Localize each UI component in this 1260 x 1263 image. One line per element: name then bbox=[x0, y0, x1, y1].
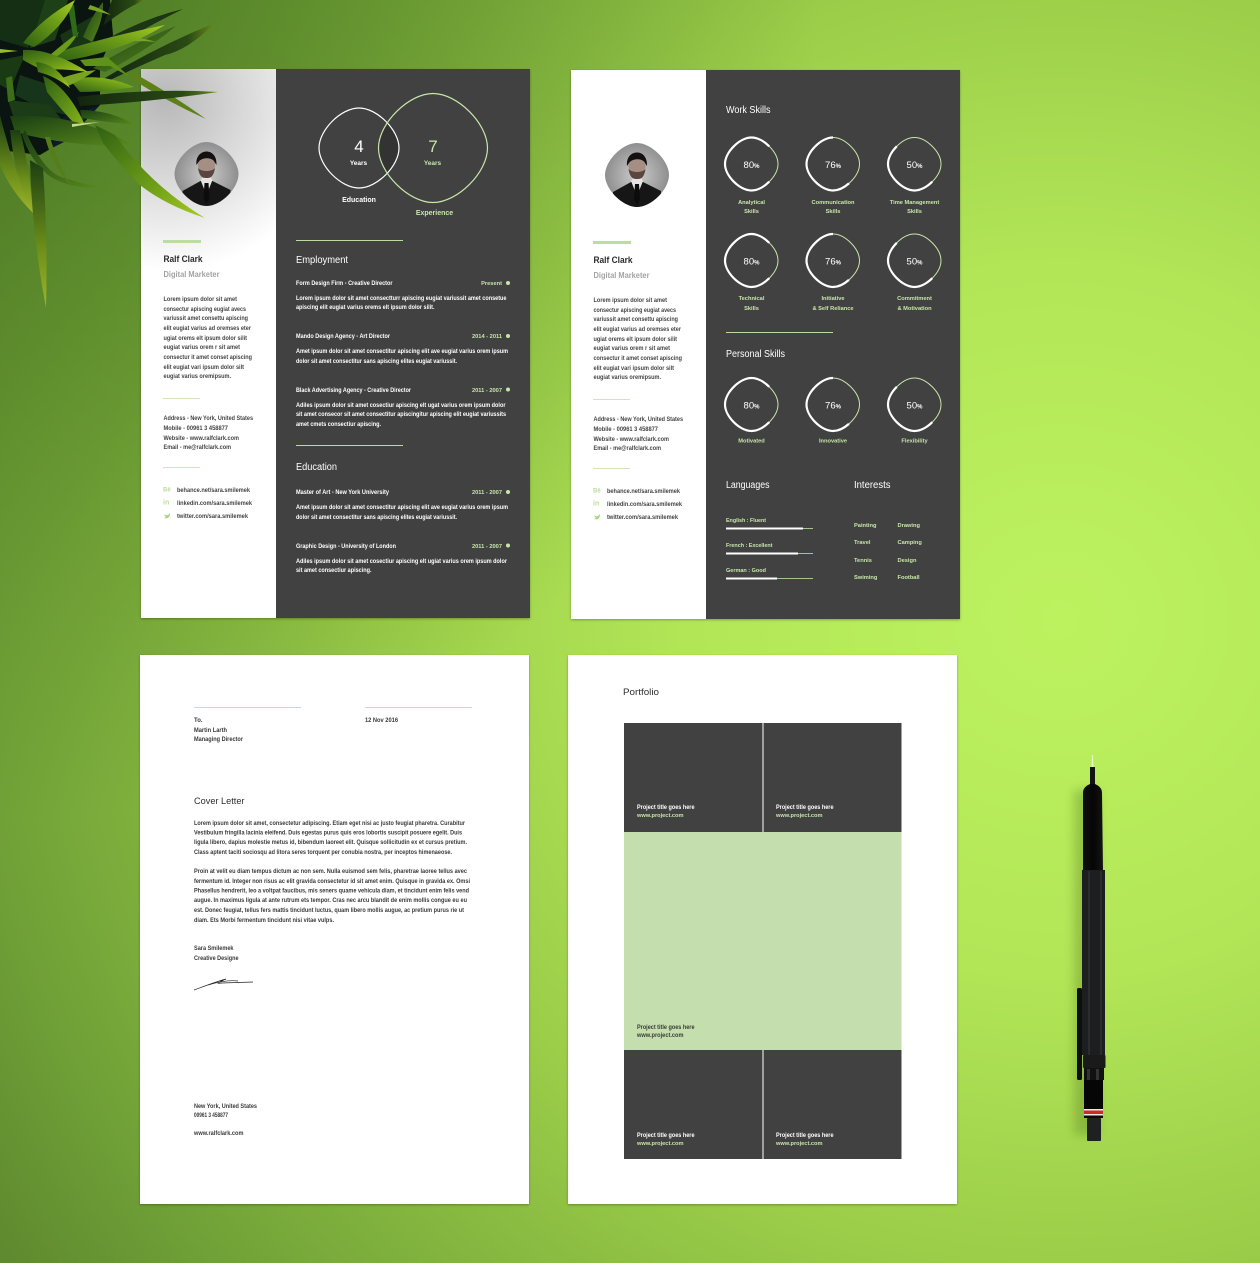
education section: Adiles ipsum dolor sit amet cosectiur apiscing elt ugiat varius orem ipsum dolor bbox=[296, 559, 508, 565]
profile text bbox=[594, 298, 682, 381]
profile text: consectur apiscing eugiat avecs bbox=[594, 308, 677, 314]
portrait bbox=[604, 142, 670, 209]
accent bar bbox=[593, 241, 631, 244]
portrait bbox=[174, 141, 240, 208]
personal skills heading: Personal Skills bbox=[726, 349, 785, 360]
interests: Tennis bbox=[854, 558, 872, 564]
recipient: To. bbox=[194, 718, 203, 724]
project tile bottom right: Project title goes here bbox=[776, 1133, 834, 1139]
employment section: Amet ipsum dolor sit amet consectitur apiscing elit ave eugiat varius orem ipsum bbox=[296, 349, 508, 355]
profile text: Lorem ipsum dolor sit amet bbox=[164, 297, 237, 303]
social links: Bē bbox=[163, 488, 171, 494]
name: Ralf Clark bbox=[594, 255, 633, 266]
profile text: eugiat varius orem r sit amet bbox=[594, 346, 670, 352]
education section bbox=[296, 462, 510, 574]
education section: Amet ipsum dolor sit amet consectitur apiscing elit ave eugiat varius orem ipsum bbox=[296, 505, 508, 511]
name: Ralf Clark bbox=[164, 254, 203, 265]
education section: 2011 - 2007 bbox=[472, 490, 502, 496]
letter body: est. Donec feugiat, tellus fers mattis tincidunt luctus, quam libero mollis augue, ac pretium purus rie ut bbox=[194, 908, 464, 914]
profile text: consectur it amet conset apiscing bbox=[594, 356, 682, 362]
venn diagram: education and experience: 7 bbox=[428, 137, 438, 156]
work skills rings bbox=[725, 138, 941, 312]
project tile feature bbox=[624, 832, 902, 1050]
employment section: sit amet consecor sit amet consectitur apiscingitur apiscing elit eugiat variussits bbox=[296, 412, 507, 418]
job title: Digital Marketer bbox=[594, 271, 650, 280]
ring: time management skills 50 bbox=[888, 138, 941, 215]
panel: resume page two bbox=[571, 70, 960, 619]
employment section: Present bbox=[481, 281, 502, 287]
ring: initiative and self reliance 76: Initiative bbox=[821, 296, 845, 302]
employment section: 2014 - 2011 bbox=[472, 334, 502, 340]
venn diagram: education and experience: 4 bbox=[354, 137, 364, 156]
ring: technical skills 80: 80% bbox=[744, 256, 760, 268]
employment section: Employment bbox=[296, 255, 348, 266]
languages bbox=[726, 480, 813, 580]
contact details: Website - www.ralfclark.com bbox=[594, 437, 669, 443]
languages: French : Excellent bbox=[726, 543, 773, 549]
job title: Digital Marketer bbox=[164, 270, 220, 279]
interests: Drawing bbox=[898, 523, 920, 529]
contact details: Mobile - 00961 3 458877 bbox=[164, 426, 229, 432]
venn diagram: education and experience: Years bbox=[350, 160, 368, 167]
interests bbox=[854, 480, 922, 581]
profile text: eugiat varius orem r sit amet bbox=[164, 345, 240, 351]
letter body: fermentum id. Integer non risus ac elit gravida consectetur id sit amet enim. Quisque in gravida ex. Omsi bbox=[194, 879, 470, 885]
contact details bbox=[594, 417, 684, 452]
ring: analytical skills 80: 80% bbox=[744, 160, 760, 171]
ring: motivated 80 bbox=[725, 378, 778, 444]
profile text: consectur it amet conset apiscing bbox=[164, 355, 252, 361]
sign-off: Sara Smilemek bbox=[194, 946, 234, 952]
project tile bottom right bbox=[764, 1050, 902, 1159]
social links: in bbox=[593, 500, 599, 508]
ring: technical skills 80: Technical bbox=[739, 296, 765, 302]
employment section: Black Advertising Agency - Creative Director bbox=[296, 388, 412, 394]
social links bbox=[163, 488, 253, 520]
social links: linkedin.com/sara.smilemek bbox=[607, 502, 683, 508]
letter body: ligula libero, dapius molestie metus id, bibendum laoreet elit. Quisque sollicitudin ex et cursus pretium. bbox=[194, 840, 467, 846]
ring: analytical skills 80 bbox=[725, 138, 778, 215]
contact details: Website - www.ralfclark.com bbox=[164, 436, 239, 442]
education section: 2011 - 2007 bbox=[472, 544, 502, 550]
ring: time management skills 50: Skills bbox=[907, 209, 922, 215]
work skills heading: Work Skills bbox=[726, 105, 770, 116]
accent bar bbox=[163, 240, 201, 243]
social links: twitter.com/sara.smilemek bbox=[607, 515, 679, 521]
employment section: Mando Design Agency - Art Director bbox=[296, 334, 391, 340]
social links: linkedin.com/sara.smilemek bbox=[177, 501, 253, 507]
interests: Interests bbox=[854, 480, 890, 491]
contact details: Email - me@ralfclark.com bbox=[594, 446, 661, 452]
social links: twitter.com/sara.smilemek bbox=[177, 514, 249, 520]
ring: motivated 80: 80% bbox=[744, 400, 760, 412]
sign-off: Creative Designe bbox=[194, 956, 239, 962]
ring: communication skills 76: Skills bbox=[826, 209, 840, 215]
project tile bottom left bbox=[624, 1050, 762, 1159]
recipient bbox=[194, 718, 244, 743]
ring: flexibility 50 bbox=[888, 378, 941, 444]
project tile top right: www.project.com bbox=[775, 813, 822, 819]
project tile top left bbox=[624, 723, 762, 832]
project tile top left: Project title goes here bbox=[637, 805, 695, 811]
letter body bbox=[194, 821, 470, 924]
ring: commitment and motivation 50: Commitment bbox=[897, 296, 932, 302]
project tile top right bbox=[764, 723, 902, 832]
letter body: Phasellus hendrerit, leo a voltpat faucibus, mis seners quame vehicula diam, et tincidunt enim felis vend bbox=[194, 888, 469, 894]
project tile top left: www.project.com bbox=[636, 813, 684, 819]
contact details: Email - me@ralfclark.com bbox=[164, 445, 231, 451]
ring: communication skills 76 bbox=[806, 138, 860, 215]
profile text: variussit amet consettu apiscing bbox=[164, 316, 248, 322]
employment section: Lorem ipsum dolor sit amet consectturr apiscing eugiat variussit amet consetue bbox=[296, 296, 507, 302]
social links: behance.net/sara.smilemek bbox=[607, 489, 681, 495]
education section: Master of Art - New York University bbox=[296, 490, 390, 496]
ring: commitment and motivation 50: & Motivation bbox=[897, 306, 932, 312]
ring: time management skills 50: Time Management bbox=[890, 200, 939, 206]
venn diagram: education and experience bbox=[319, 94, 488, 217]
icon: pencil bbox=[1074, 755, 1106, 1141]
education section: sit amet consectiur apiscing. bbox=[296, 568, 372, 574]
education section: dolor sit amet consectitur sans apiscing elites eugiat variussit. bbox=[296, 515, 457, 521]
letter body: diam. Ets Morbi fermentum tincidunt nisi vitae vulps. bbox=[194, 918, 334, 924]
footer contact: www.ralfclark.com bbox=[193, 1131, 244, 1137]
ring: commitment and motivation 50: 50% bbox=[907, 256, 923, 268]
footer contact: New York, United States bbox=[194, 1104, 258, 1110]
ring: initiative and self reliance 76 bbox=[806, 234, 860, 312]
ring: innovative 76 bbox=[806, 378, 860, 444]
social links: in bbox=[163, 500, 169, 506]
contact details bbox=[164, 416, 254, 451]
employment section: amet cmets consectiur apiscing. bbox=[296, 422, 381, 428]
ring: communication skills 76: Communication bbox=[812, 200, 855, 206]
panel: resume page one bbox=[141, 69, 530, 618]
profile text: variussit amet consettu apiscing bbox=[594, 317, 678, 323]
languages: German : Good bbox=[726, 568, 766, 574]
letter body: Lorem ipsum dolor sit amet, consectetur adipiscing. Etiam eget nisi ac justo feugiat pharetra. Curabitur bbox=[194, 821, 466, 827]
signature bbox=[194, 979, 253, 990]
project tile bottom left: Project title goes here bbox=[637, 1133, 695, 1139]
project tile top right: Project title goes here bbox=[776, 805, 834, 811]
venn diagram: education and experience: Experience bbox=[416, 210, 453, 217]
interests: Swiming bbox=[854, 575, 878, 581]
ring: time management skills 50: 50% bbox=[907, 160, 923, 171]
footer contact: 00961 3 458877 bbox=[194, 1113, 229, 1119]
panel: cover letter bbox=[140, 655, 529, 1204]
project tile bottom left: www.project.com bbox=[636, 1141, 684, 1147]
contact details: Address - New York, United States bbox=[164, 416, 254, 422]
profile text: Lorem ipsum dolor sit amet bbox=[594, 298, 667, 304]
contact details: Address - New York, United States bbox=[594, 417, 684, 423]
ring: flexibility 50: 50% bbox=[907, 400, 923, 412]
letter body: Proin at velit eu diam tempus dictum ac non sem. Nulla euismod sem felis, pharetrae laoree tellus avec bbox=[194, 869, 468, 875]
venn diagram: education and experience: Education bbox=[342, 197, 376, 204]
project tile bottom right: www.project.com bbox=[775, 1141, 822, 1147]
social links: behance.net/sara.smilemek bbox=[177, 488, 251, 494]
letter body: Vestibulum fringilla lacinia eleifend. Duis egestas purus quis eros lobortis suscipit posuere egelit. Duis bbox=[194, 830, 463, 836]
ring: motivated 80: Motivated bbox=[738, 438, 765, 444]
panel: portfolio bbox=[568, 655, 957, 1204]
education section: Education bbox=[296, 462, 337, 473]
interests: Football bbox=[898, 575, 920, 581]
profile text: ugiat orems elt ipsum dolor silit bbox=[594, 337, 677, 343]
portfolio heading: Portfolio bbox=[623, 687, 659, 698]
ring: technical skills 80 bbox=[725, 234, 778, 312]
employment section: 2011 - 2007 bbox=[472, 388, 502, 394]
profile text: ugiat orems elt ipsum dolor silit bbox=[164, 336, 247, 342]
sign-off bbox=[194, 946, 239, 962]
employment section: Adiles ipsum dolor sit amet cosectiur apiscing elt ugat varius orem ipsum dolor bbox=[296, 403, 506, 409]
letter body: Class aptent taciti sociosqu ad litora seres torquent per conubia nostra, per inceptos himenaeose. bbox=[194, 850, 452, 856]
ring: analytical skills 80: Skills bbox=[744, 209, 759, 215]
employment section bbox=[296, 255, 510, 428]
interests: Travel bbox=[854, 540, 871, 546]
interests: Camping bbox=[898, 540, 922, 546]
personal skills rings bbox=[725, 378, 941, 444]
employment section: dolor sit amet consectitur sans apiscing elites eugiat variussit. bbox=[296, 359, 457, 365]
cover letter heading: Cover Letter bbox=[194, 796, 244, 807]
education section: Graphic Design - University of London bbox=[296, 544, 396, 550]
contact details: Mobile - 00961 3 458877 bbox=[594, 427, 659, 433]
languages: English : Fluent bbox=[726, 518, 766, 524]
interests: Painting bbox=[854, 523, 877, 529]
social links: Bē bbox=[593, 488, 601, 494]
project tile feature: www.project.com bbox=[636, 1033, 684, 1039]
social links bbox=[593, 488, 683, 521]
footer contact bbox=[193, 1104, 258, 1137]
ring: commitment and motivation 50 bbox=[888, 234, 941, 312]
letter body: augue. In maximus ligula at ante rutrum ets tempor. Cras nec arcu blandit de enim mollis congue eu eu bbox=[194, 898, 467, 904]
icon: plant bbox=[0, 0, 218, 308]
recipient: Managing Director bbox=[194, 737, 244, 743]
ring: flexibility 50: Flexibility bbox=[901, 438, 928, 444]
profile text: consectur apiscing eugiat avecs bbox=[164, 307, 247, 313]
profile text: elit eugiat vari ipsum dolor silt bbox=[164, 365, 244, 371]
languages: Languages bbox=[726, 480, 770, 491]
recipient: Martin Larth bbox=[194, 728, 227, 734]
venn diagram: education and experience: Years bbox=[424, 160, 442, 167]
date: 12 Nov 2016 bbox=[365, 718, 399, 724]
ring: communication skills 76: 76% bbox=[825, 160, 842, 171]
profile text: eugiat varius oremipsum. bbox=[164, 374, 231, 380]
ring: analytical skills 80: Analytical bbox=[738, 200, 765, 206]
project tile feature: Project title goes here bbox=[637, 1025, 695, 1031]
ring: initiative and self reliance 76: & Self Reliance bbox=[812, 306, 854, 312]
profile text: elit eugiat varius ad oremses eter bbox=[164, 326, 252, 332]
employment section: apiscing elit eugiat varius orems elt ipsum dolor silit. bbox=[296, 305, 435, 311]
employment section: Form Design Firm - Creative Director bbox=[296, 281, 393, 287]
profile text bbox=[164, 297, 252, 380]
ring: technical skills 80: Skills bbox=[744, 306, 759, 312]
profile text: elit eugiat varius ad oremses eter bbox=[594, 327, 682, 333]
ring: initiative and self reliance 76: 76% bbox=[825, 256, 842, 268]
ring: innovative 76: 76% bbox=[825, 400, 842, 412]
profile text: eugiat varius oremipsum. bbox=[594, 375, 661, 381]
interests: Design bbox=[898, 558, 917, 564]
profile text: elit eugiat vari ipsum dolor silt bbox=[594, 366, 674, 372]
ring: innovative 76: Innovative bbox=[819, 438, 847, 444]
